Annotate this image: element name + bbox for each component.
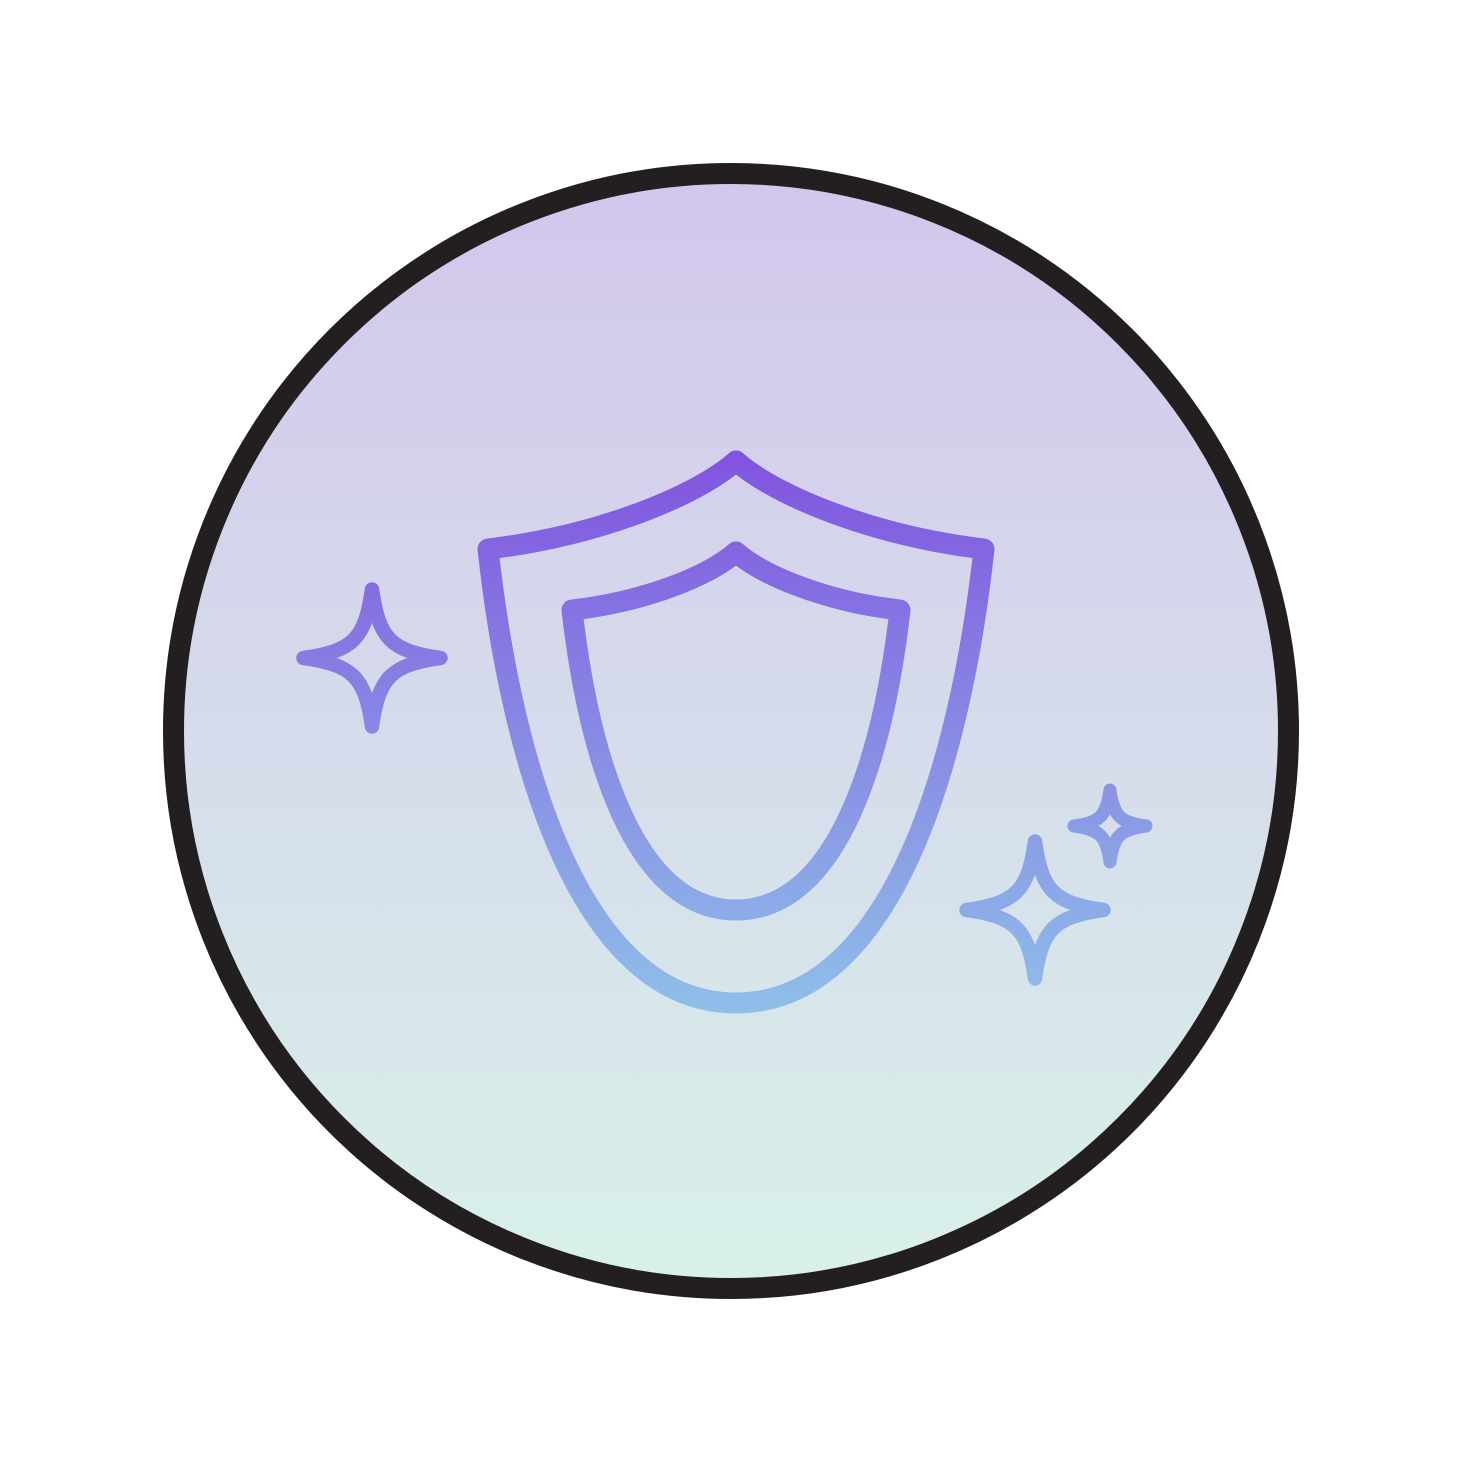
left sparkle <box>304 590 440 726</box>
inner shield outline <box>572 552 900 910</box>
upper right sparkle <box>1074 790 1146 862</box>
outer shield outline <box>488 461 984 1003</box>
background circle <box>174 174 1288 1288</box>
lower right sparkle <box>966 842 1104 978</box>
